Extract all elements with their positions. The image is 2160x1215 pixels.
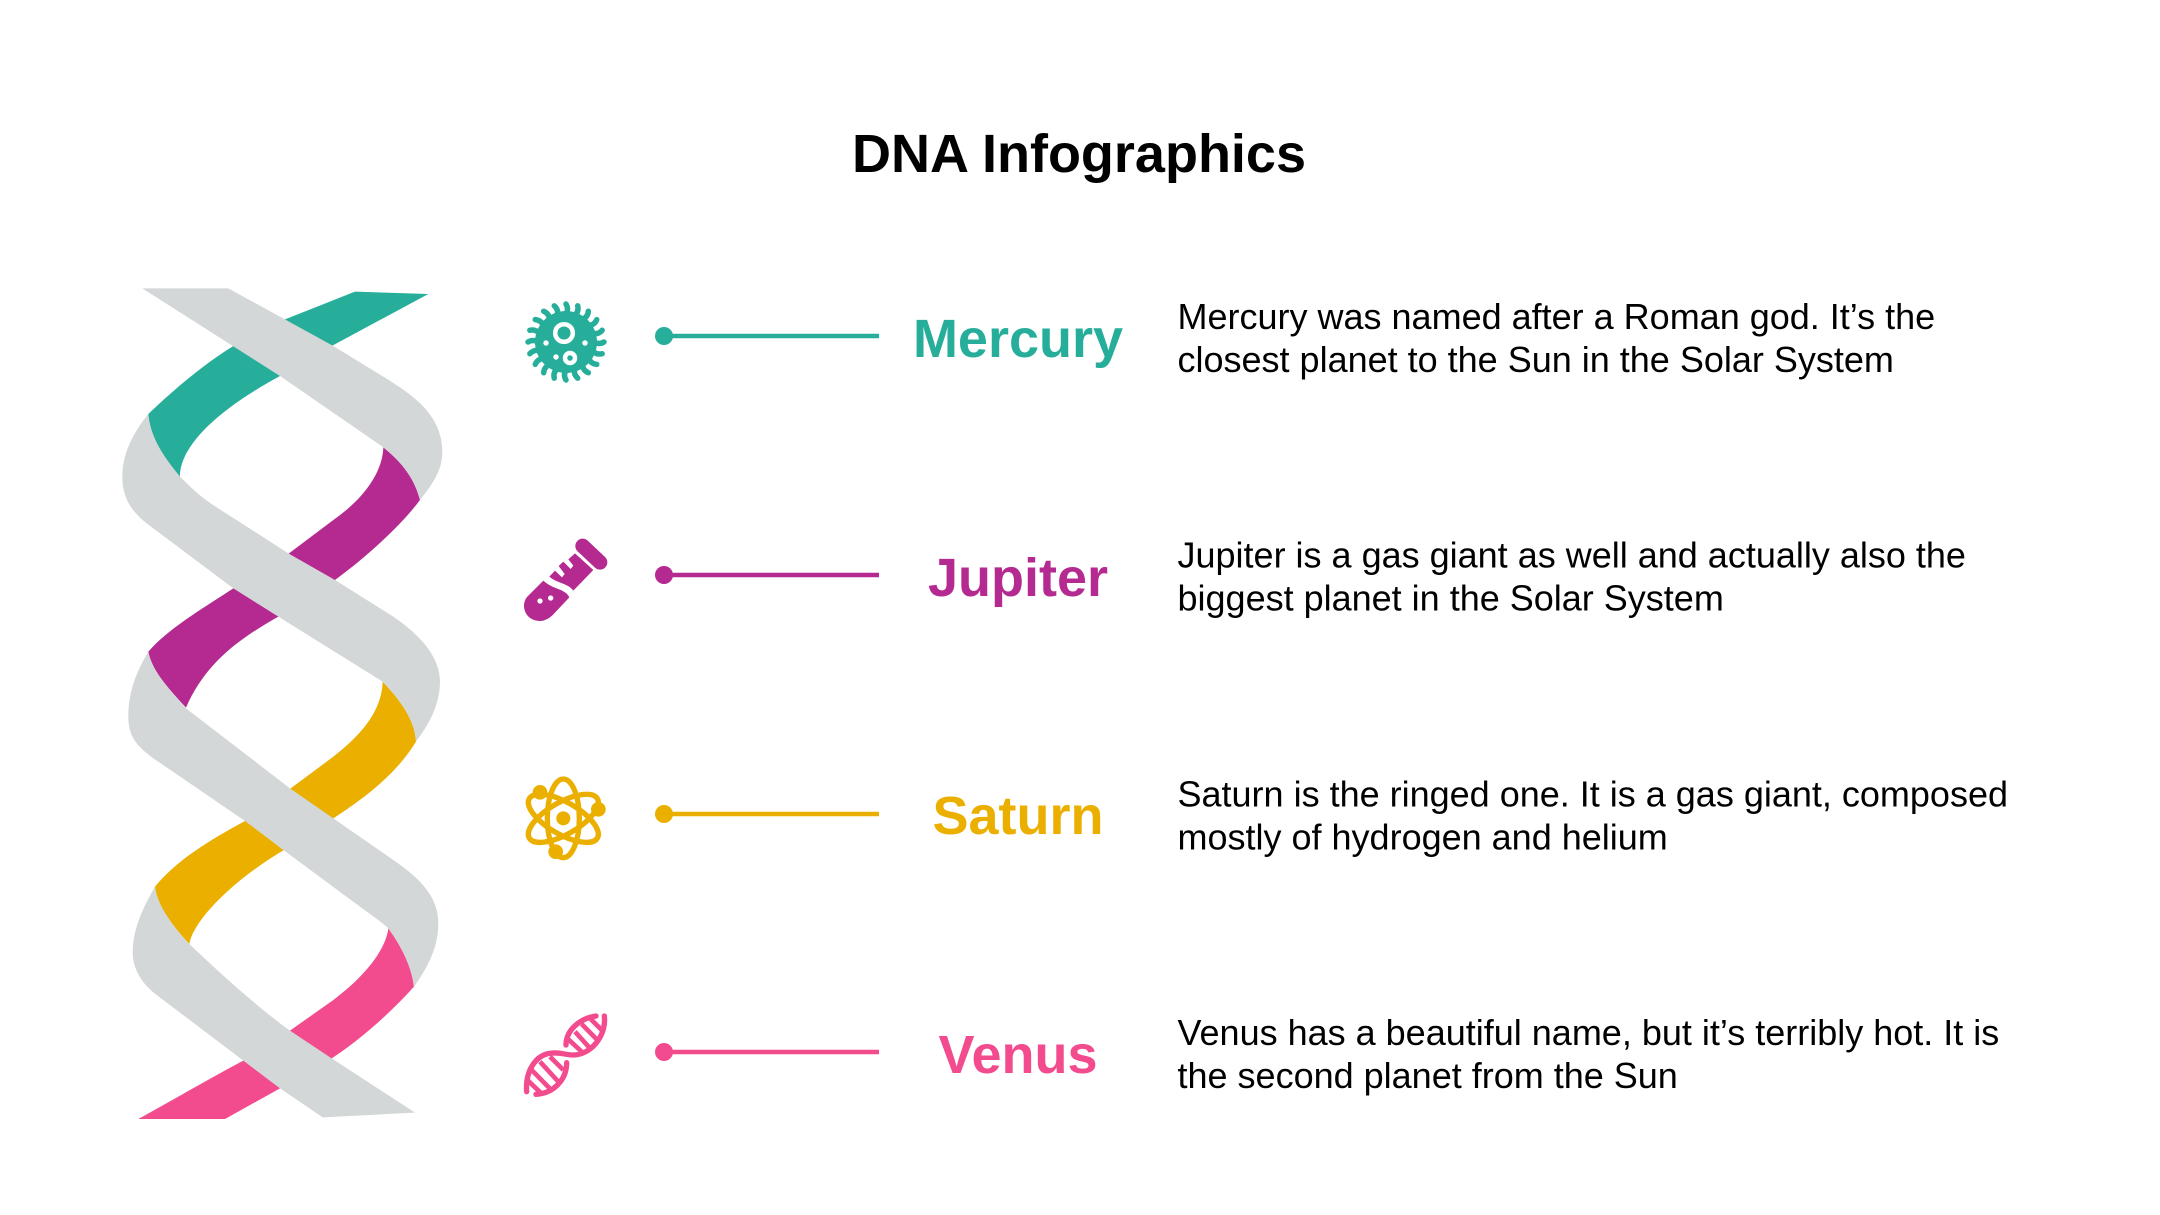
connector: Venus bbox=[655, 1043, 879, 1061]
description: Venus: Venus has a beautiful name, but it’s terribly hot. It is bbox=[1178, 1012, 1999, 1053]
gray strand: third bbox=[128, 652, 438, 987]
description: Saturn: Saturn is the ringed one. It is a gas giant, composed bbox=[1178, 774, 2008, 814]
label: Mercury: Mercury bbox=[913, 309, 1123, 369]
gray strand: top bbox=[142, 288, 442, 500]
helix strand: magenta bbox=[148, 447, 420, 708]
label: Jupiter: Jupiter bbox=[928, 548, 1108, 608]
title: DNA Infographics bbox=[852, 124, 1306, 184]
helix strand: yellow bbox=[155, 682, 416, 944]
label: Venus: Venus bbox=[938, 1025, 1098, 1085]
description: Jupiter: Jupiter is a gas giant as well and actually also the bbox=[1178, 534, 1966, 576]
label: Saturn: Saturn bbox=[932, 786, 1104, 846]
icon: test tube bbox=[524, 546, 600, 621]
icon: virus bbox=[528, 304, 604, 380]
connector: Jupiter bbox=[655, 566, 879, 584]
description: Mercury: Mercury was named after a Roman god. It’s the bbox=[1178, 296, 1935, 337]
connector: Saturn bbox=[655, 805, 879, 823]
gray strand: second bbox=[122, 414, 440, 742]
gray strand: bottom bbox=[133, 887, 415, 1117]
icon: DNA bbox=[527, 1016, 605, 1094]
DNA double helix bbox=[122, 288, 442, 1119]
helix strand: teal bbox=[148, 292, 428, 477]
description: Venus: the second planet from the Sun bbox=[1178, 1055, 1678, 1096]
description: Mercury: closest planet to the Sun in the Solar System bbox=[1178, 339, 1894, 380]
description: Jupiter: biggest planet in the Solar System bbox=[1178, 578, 1724, 618]
icon: atom bbox=[521, 779, 606, 859]
description: Saturn: mostly of hydrogen and helium bbox=[1178, 816, 1668, 858]
helix strand: pink bbox=[138, 928, 414, 1119]
connector: Mercury bbox=[655, 327, 879, 345]
